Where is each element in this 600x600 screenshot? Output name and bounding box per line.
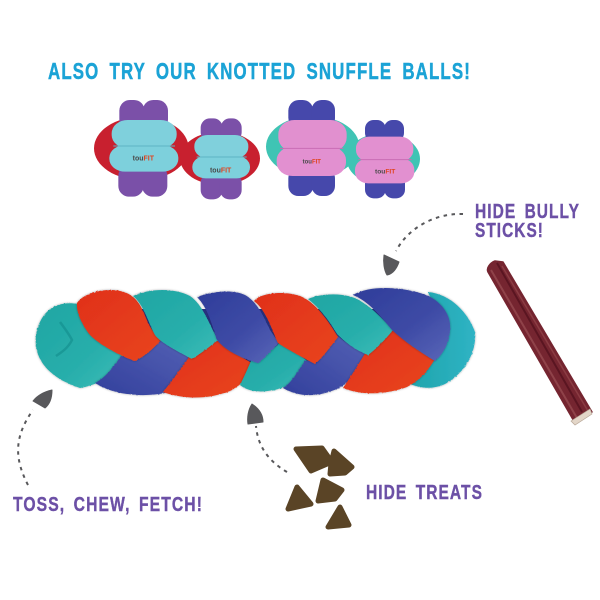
braid: upper red strand four [254,293,338,364]
snuffle balls product row [94,100,420,199]
label: hide bully sticks: STICKS! [475,219,544,242]
ball: small red and cyan [180,118,260,199]
label: toss, chew, fetch: TOSS, CHEW, FETCH! [13,493,203,516]
ball: small teal and pink [347,120,420,198]
braid: lower teal strand three [240,343,310,391]
braid: upper blue strand six [353,288,450,361]
ball: large red and cyan: touFIT [133,155,155,162]
braid: inner backing [70,309,440,375]
braid: lower blue strand four [283,335,370,395]
braid: upper red strand one [77,290,161,361]
ball: small teal and pink: touFIT [375,169,395,176]
braid: upper teal strand two [133,290,218,359]
callout arrow: hide bully sticks [384,214,463,275]
label: hide bully sticks [475,200,580,242]
treats pile [288,448,352,527]
ball: large red and cyan [94,100,189,197]
braid: left teal end loop [36,303,125,388]
ball: large teal and pink [266,100,359,196]
ball: small red and cyan: touFIT [210,167,232,174]
braided plush toy [36,288,475,398]
bully stick [487,261,592,425]
braid: upper blue strand three [197,291,279,363]
callout arrow: hide treats [248,404,287,472]
braid: lower blue strand one [95,338,194,395]
braid: right teal end [410,292,475,388]
label: hide treats: HIDE TREATS [366,481,483,504]
callout arrow: toss, chew, fetch [18,390,52,485]
ball: large teal and pink: touFIT [303,160,321,166]
braid: left loop crease [56,322,72,356]
braid: lower red strand two [163,338,254,398]
braid: lower red strand five [343,328,435,393]
braid: upper teal strand five [308,294,393,355]
